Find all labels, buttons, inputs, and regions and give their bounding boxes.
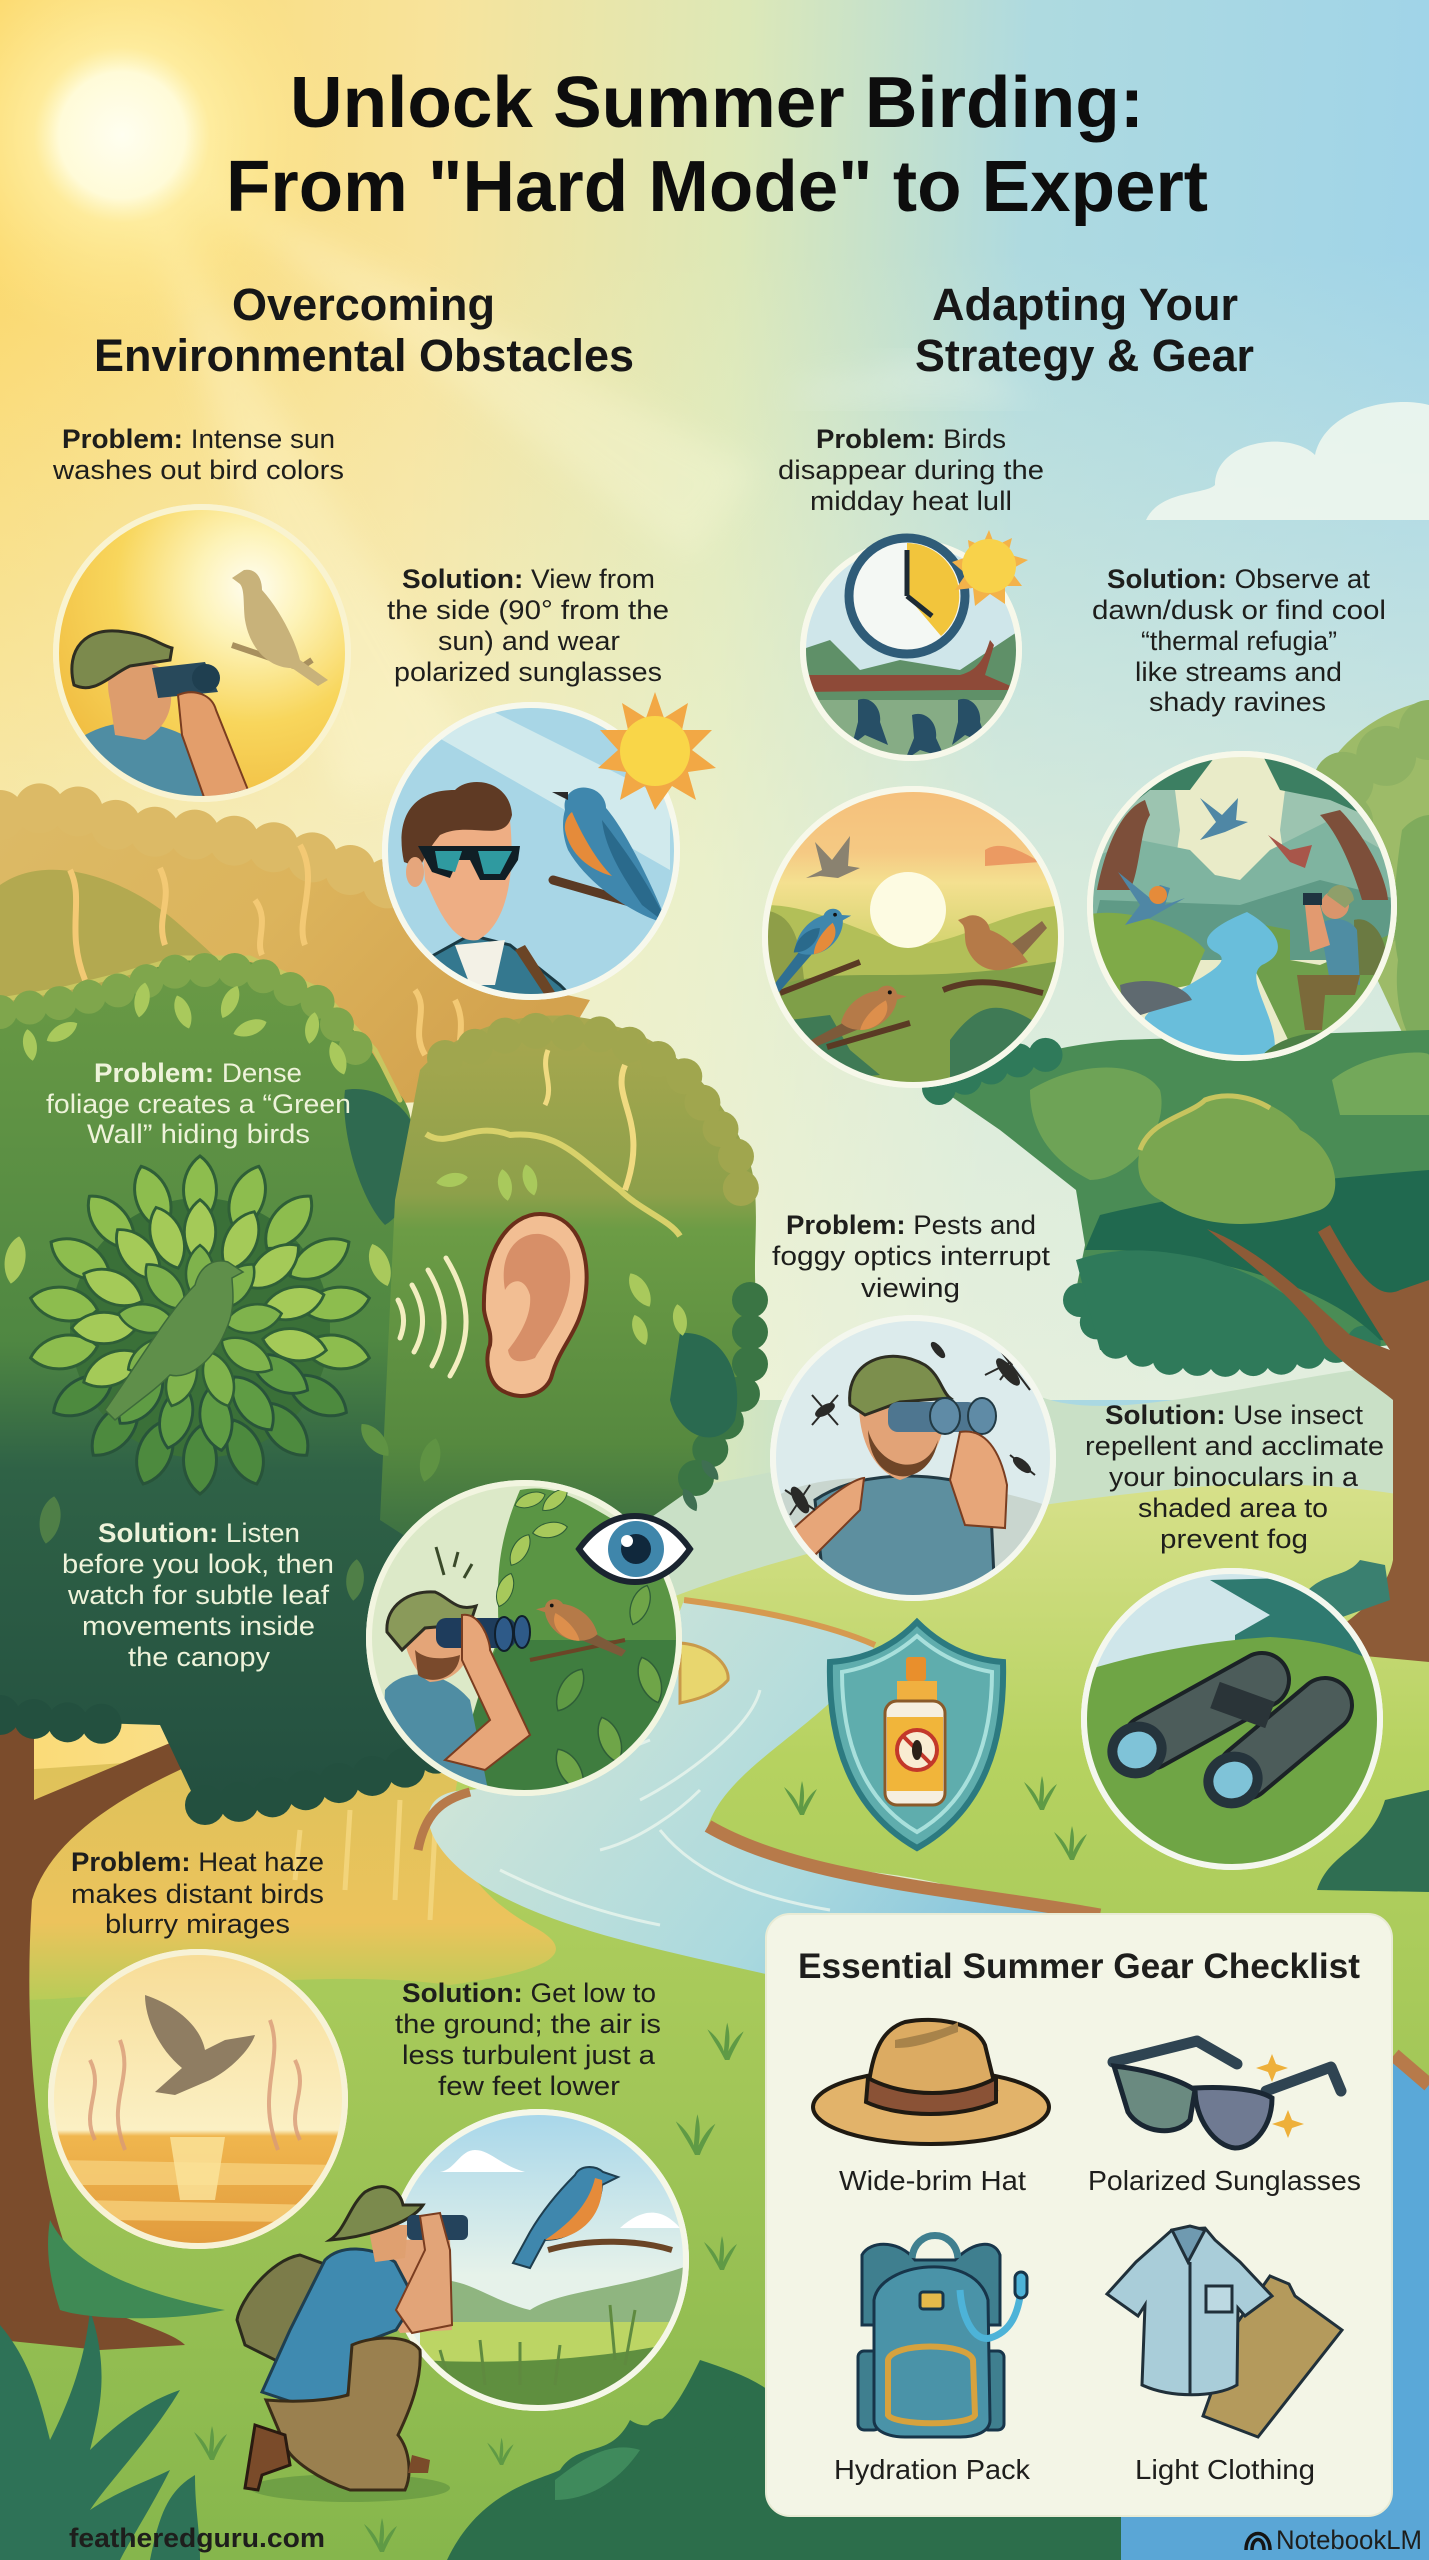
- man: [402, 782, 575, 1000]
- text: problem heat haze: makes distant birds: [71, 1879, 324, 1909]
- heading: overcoming environmental obstacles: Overcoming: [232, 279, 495, 330]
- birder with binoculars: [72, 631, 248, 800]
- text: problem intense sun: washes out bird colors: [52, 455, 344, 485]
- circle: view from low ground: [387, 2108, 690, 2413]
- title: From "Hard Mode" to Expert: [226, 147, 1208, 227]
- text: problem birds disappear: Problem: Birds: [816, 424, 1006, 454]
- distant pale hills: [540, 1360, 1429, 1650]
- bottom-right dark bush: [1317, 1790, 1429, 1892]
- icon: sun with rays: [598, 692, 716, 810]
- left tree trunk: [0, 1700, 240, 2350]
- circle: sun washes out bird: [50, 500, 360, 810]
- text: solution view from the side: polarized sunglasses: [394, 657, 662, 687]
- bush behind ear: [380, 1015, 757, 1610]
- scattered foliage leaves: [1, 981, 722, 1601]
- title: [226, 63, 1208, 227]
- text: problem intense sun: [52, 424, 344, 485]
- circle: clock midday lull: [800, 539, 1022, 761]
- text: problem dense foliage: [46, 1058, 351, 1149]
- icon: wide-brim hat: [813, 2020, 1049, 2144]
- text: solution get low: [395, 1978, 661, 2101]
- text: solution view from the side: Solution: View from: [402, 564, 655, 594]
- text: solution observe at dawn and dusk: dawn/dusk or find cool: [1092, 595, 1386, 625]
- text: solution listen before you look: before you look, then: [62, 1549, 334, 1579]
- icon: hydration pack: [858, 2236, 1027, 2437]
- text: solution listen before you look: the canopy: [128, 1642, 271, 1672]
- circle: binoculars acclimating in shade: [1080, 1568, 1385, 1873]
- text: problem pests and foggy optics: foggy optics interrupt: [772, 1241, 1051, 1271]
- small teal bush by trunk: [1300, 1560, 1390, 1625]
- tree canopy: right: [939, 1030, 1429, 1360]
- circle: dawn birds: [758, 785, 1070, 1090]
- tree canopy: left: [0, 957, 470, 1810]
- text: problem birds disappear: disappear during the: [778, 455, 1044, 485]
- label: wide-brim hat: Wide-brim Hat: [839, 2165, 1026, 2196]
- lower left plants: [0, 2220, 225, 2560]
- text: problem pests and foggy optics: Problem: Pests and: [786, 1210, 1036, 1240]
- text: problem heat haze: blurry mirages: [105, 1909, 290, 1939]
- text: solution insect repellent: your binoculars in a: [1109, 1462, 1359, 1492]
- icon: polarized sunglasses: [1113, 2041, 1341, 2148]
- heading: overcoming environmental obstacles: Environmental Obstacles: [94, 330, 634, 381]
- hiker: [794, 1354, 1008, 1595]
- text: solution observe at dawn and dusk: [1092, 564, 1386, 717]
- panel: essential summer gear checklist: [766, 1914, 1392, 2516]
- perched bluebird: [513, 2167, 672, 2268]
- bird on branch: [552, 787, 668, 925]
- text: problem pests and foggy optics: viewing: [861, 1273, 960, 1303]
- river: [418, 1600, 1429, 2560]
- checklist heading: Essential Summer Gear Checklist: [798, 1947, 1360, 1986]
- text: solution observe at dawn and dusk: shady ravines: [1149, 687, 1326, 717]
- footer: source site: featheredguru.com: [69, 2523, 325, 2553]
- text: solution insect repellent: prevent fog: [1160, 1524, 1308, 1554]
- text: solution get low: less turbulent just a: [402, 2040, 656, 2070]
- heading: adapting your strategy and gear: Strategy & Gear: [915, 330, 1254, 381]
- text: solution get low: Solution: Get low to: [402, 1978, 656, 2008]
- text: problem birds disappear: [778, 424, 1044, 516]
- text: solution view from the side: the side (90° from the: [387, 595, 669, 625]
- text: solution get low: few feet lower: [438, 2071, 620, 2101]
- icon: light clothing: [1107, 2226, 1342, 2437]
- flying bird: [145, 1995, 255, 2095]
- text: problem pests and foggy optics: [772, 1210, 1051, 1303]
- binoculars: [1098, 1680, 1325, 1818]
- circle: stream thermal refugia: [1085, 750, 1400, 1065]
- text: solution listen before you look: movements inside: [82, 1611, 315, 1641]
- text: problem birds disappear: midday heat lull: [810, 486, 1012, 516]
- label: light clothing: Light Clothing: [1135, 2454, 1315, 2485]
- grass tufts: [194, 1776, 1087, 2552]
- text: solution insect repellent: shaded area to: [1138, 1493, 1328, 1523]
- footer: notebooklm mark: NotebookLM: [1276, 2525, 1422, 2555]
- robin on branch: [530, 1599, 626, 1660]
- birder: [380, 1592, 530, 1800]
- birder at stream: [1264, 885, 1385, 1054]
- label: hydration pack: Hydration Pack: [834, 2454, 1031, 2485]
- heading: adapting your strategy and gear: Adapting Your: [932, 279, 1238, 330]
- circle: watch the canopy: [365, 1480, 690, 1800]
- meadow: [0, 1484, 1429, 2560]
- heading: overcoming environmental obstacles: [94, 279, 634, 381]
- text: problem dense foliage: Problem: Dense: [94, 1058, 302, 1088]
- icon: eye: [579, 1516, 690, 1582]
- mosquitoes: [785, 1340, 1035, 1515]
- clouds: [784, 357, 1429, 520]
- text: solution view from the side: sun) and wear: [438, 626, 620, 656]
- text: solution observe at dawn and dusk: Solution: Observe at: [1107, 564, 1371, 594]
- icon: ear with sound waves: [398, 1214, 587, 1396]
- title: Unlock Summer Birding:: [290, 63, 1144, 143]
- icon: shield with insect repellent: [830, 1622, 1003, 1848]
- icon: clock and sun: [849, 530, 1028, 654]
- text: solution observe at dawn and dusk: “thermal refugia”: [1141, 626, 1337, 656]
- kneeling birder with binoculars: [237, 2187, 468, 2502]
- text: solution insect repellent: [1085, 1400, 1384, 1554]
- circle: heat haze mirage: [48, 1949, 348, 2250]
- text: problem heat haze: Problem: Heat haze: [71, 1847, 324, 1877]
- text: problem dense foliage: foliage creates a “Green: [46, 1089, 351, 1119]
- right far foliage: [1303, 700, 1429, 1090]
- heat haze field: [20, 1740, 556, 2000]
- text: solution listen before you look: watch for subtle leaf: [67, 1580, 330, 1610]
- circle: polarized sunglasses man: [380, 700, 690, 1000]
- text: solution listen before you look: Solution: Listen: [98, 1518, 300, 1548]
- text: solution insect repellent: Solution: Use insect: [1105, 1400, 1364, 1430]
- text: problem intense sun: Problem: Intense sun: [62, 424, 335, 454]
- text: solution get low: the ground; the air is: [395, 2009, 661, 2039]
- right tree trunk: [1207, 1225, 1429, 1662]
- sprigs at bottom of circle: [790, 1008, 1040, 1080]
- text: solution listen before you look: [62, 1518, 334, 1672]
- icon: bird hidden in green wall of leaves: [28, 1156, 372, 1494]
- bottom bushes: [447, 2360, 1121, 2560]
- sun: [0, 0, 332, 345]
- circle: pests and fog: [766, 1315, 1060, 1601]
- birds over stream: [1200, 798, 1248, 840]
- heading: adapting your strategy and gear: [915, 279, 1254, 381]
- label: polarized sunglasses: Polarized Sunglasses: [1088, 2165, 1361, 2196]
- text: problem heat haze: [71, 1847, 324, 1939]
- text: solution insect repellent: repellent and acclimate: [1085, 1431, 1384, 1461]
- washed-out bird silhouette: [232, 570, 328, 686]
- text: solution observe at dawn and dusk: like streams and: [1135, 657, 1342, 687]
- bottom right water: [1121, 2510, 1429, 2560]
- far yellow foliage: [0, 805, 590, 1120]
- flying bird: [806, 836, 860, 878]
- text: problem dense foliage: Wall” hiding birds: [87, 1119, 310, 1149]
- text: solution view from the side: [387, 564, 669, 687]
